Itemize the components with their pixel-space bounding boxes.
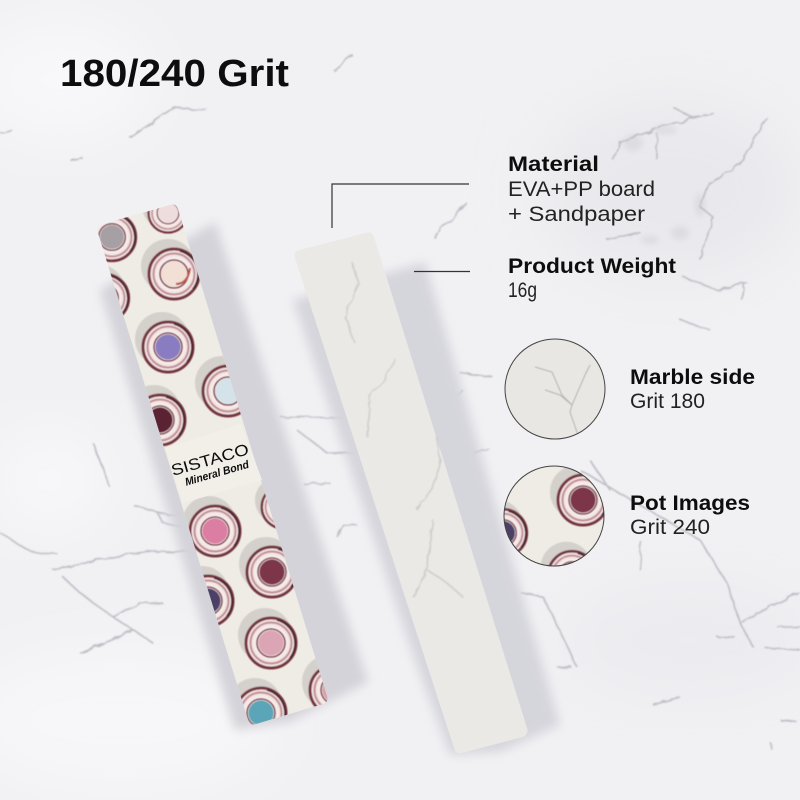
text: material xyxy=(508,153,655,226)
text: product weight: Product Weight xyxy=(508,255,676,278)
text: product weight xyxy=(508,255,676,302)
icon: marble side detail xyxy=(505,339,605,439)
text: product weight: 16g xyxy=(508,279,537,302)
paper band xyxy=(165,424,262,503)
text: marble side: Grit 180 xyxy=(630,390,705,413)
text: material: + Sandpaper xyxy=(508,203,645,226)
brand label: SISTACO xyxy=(169,441,251,480)
brand label xyxy=(169,441,254,491)
panel: pot-image nail file xyxy=(98,204,328,724)
brand label: Mineral Bond xyxy=(184,459,251,489)
text: pot images xyxy=(630,492,750,539)
pot images xyxy=(98,204,328,724)
icon: pot images detail xyxy=(504,466,604,566)
text: pot images: Grit 240 xyxy=(630,516,710,539)
callout line: material xyxy=(332,184,469,228)
panel: marble nail file xyxy=(294,232,528,753)
shadow: left file xyxy=(100,222,368,730)
text: marble side xyxy=(630,366,755,413)
text: material: EVA+PP board xyxy=(508,178,655,201)
text: pot images: Pot Images xyxy=(630,492,750,515)
soft blotches xyxy=(623,126,705,244)
text: marble side: Marble side xyxy=(630,366,755,389)
title: 180/240 Grit xyxy=(60,53,289,95)
shadow: right file xyxy=(293,262,560,755)
marble veins xyxy=(345,262,463,597)
callout line: weight xyxy=(414,270,470,272)
text: material: Material xyxy=(508,153,599,176)
